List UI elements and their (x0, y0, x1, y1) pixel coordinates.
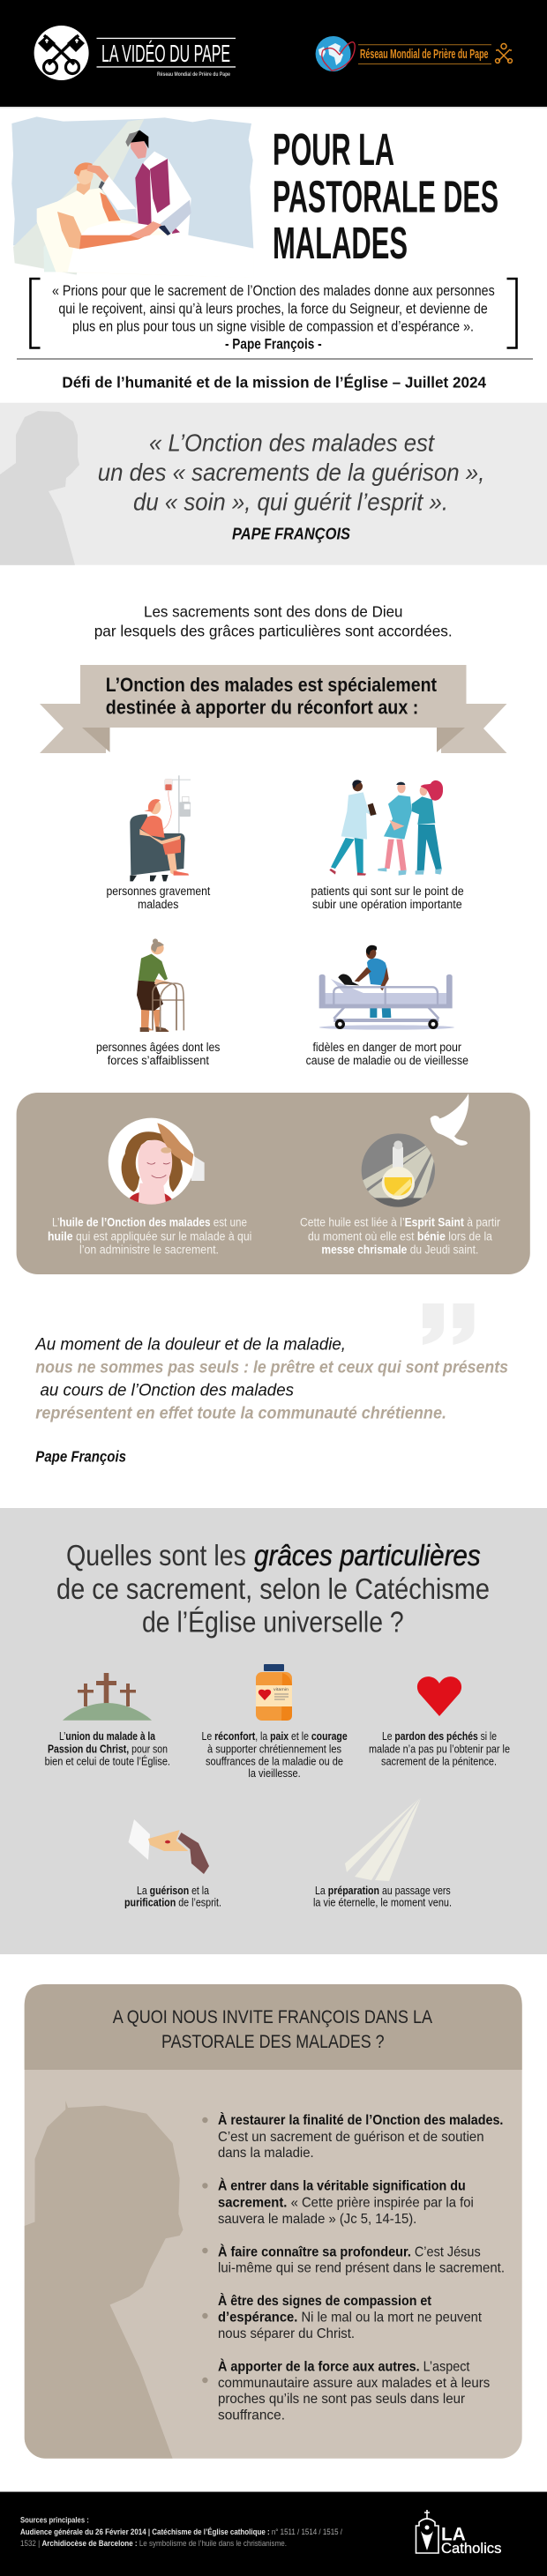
text: Holy Spirit explanation: messe chrismale du Jeudi saint. (321, 1243, 478, 1257)
item 5 (202, 2358, 490, 2423)
panel: pope quote band: un des « sacrements de la guérison », (98, 459, 484, 486)
sources: Audience générale du 26 Février 2014 | Catéchisme de l’Église catholique : n° 1511 / 1514 / 1515 / (20, 2527, 342, 2536)
item 2: sauvera le malade » (Jc 5, 14-15). (218, 2212, 416, 2227)
icon: pope silhouette (25, 2101, 184, 2459)
icon: three crosses on a hill (63, 1673, 152, 1721)
caption: union: bien et celui de toute l’Église. (45, 1754, 170, 1767)
caption: forgiveness (369, 1729, 510, 1767)
illustration: priest anointing a patient (11, 116, 253, 278)
caption: comfort: souffrances de la maladie ou de (206, 1754, 343, 1767)
panel: Francis's invitation (25, 1984, 522, 2459)
text: oil explanation (48, 1216, 251, 1257)
icon: pope silhouette (0, 411, 79, 565)
item 1: À restaurer la finalité de l’Onction des malades. (218, 2111, 503, 2128)
caption: comfort: Le réconfort, la paix et le courage (201, 1729, 348, 1743)
bullet list (202, 2111, 505, 2423)
caption: comfort (201, 1729, 348, 1780)
pope quote: not alone: au cours de l’Onction des malades (41, 1381, 294, 1400)
heading (56, 1539, 490, 1639)
caption: forgiveness: sacrement de la pénitence. (381, 1754, 497, 1767)
item 5: souffrance. (218, 2408, 285, 2423)
caption: comfort: à supporter chrétiennement les (207, 1743, 341, 1756)
text: oil explanation: L’huile de l’Onction des malades est une (52, 1216, 247, 1229)
caption: union: L’union du malade à la (59, 1729, 156, 1743)
prayer quote with brackets (30, 279, 517, 353)
caption: forgiveness: Le pardon des péchés si le (382, 1729, 497, 1743)
item 5: À apporter de la force aux autres. L’aspect (218, 2358, 470, 2374)
item 1 (202, 2111, 503, 2161)
header band (0, 0, 547, 108)
caption: in danger of death: cause de maladie ou de vieillesse (306, 1054, 468, 1067)
panel: pope quote band (0, 403, 547, 565)
icon: anointed forehead (109, 1118, 205, 1206)
sources: Sources principales : (20, 2516, 89, 2525)
caption: comfort: la vieillesse. (248, 1766, 301, 1780)
caption: surgery patients: patients qui sont sur le point de (311, 885, 464, 898)
item 5: proches qu’ils ne sont pas seuls dans leur (218, 2392, 466, 2407)
icon: globe with heart (316, 36, 355, 71)
prayer quote with brackets: qui le reçoivent, ainsi qu’à leurs proches, la force du Seigneur, et devienne de (58, 301, 488, 317)
subtitle: challenge of the month: Défi de l’humanité et de la mission de l’Église – Juillet 2024 (62, 372, 486, 391)
caption: seriously ill: malades (138, 898, 179, 911)
heading: grâces particulières (254, 1539, 481, 1572)
caption: preparation (313, 1884, 452, 1909)
logo: La Vidéo du Pape: Réseau Mondial de Prière du Pape (157, 71, 230, 78)
caption: forgiveness: malade n’a pas pu l’obtenir par le (369, 1743, 510, 1756)
caption: elderly: personnes âgées dont les (96, 1041, 221, 1054)
caption: in danger of death (306, 1041, 468, 1067)
text: Holy Spirit explanation: du moment où elle est bénie lors de la (308, 1229, 492, 1243)
item 1: C’est un sacrement de guérison et de soutien (218, 2130, 484, 2145)
item 3: À faire connaître sa profondeur. C’est Jésus (218, 2243, 481, 2259)
heading: de l’Église universelle ? (142, 1606, 404, 1639)
heading: PASTORALE DES MALADES ? (161, 2032, 385, 2052)
icon: elderly woman with walker (137, 938, 184, 1032)
text: oil explanation: l’on administre le sacrement. (79, 1243, 219, 1257)
logo: LA Catholics (416, 2510, 501, 2557)
caption: healing (124, 1884, 221, 1909)
item 2: À entrer dans la véritable signification du (218, 2177, 466, 2194)
item 1: dans la maladie. (218, 2146, 314, 2161)
ribbon heading (40, 665, 506, 753)
caption: healing: La guérison et la (137, 1884, 210, 1897)
title (273, 124, 498, 268)
icon: vitamin bottle (256, 1664, 292, 1721)
icon: red heart (417, 1676, 461, 1716)
caption: preparation: la vie éternelle, le moment venu. (313, 1896, 452, 1909)
text: Holy Spirit explanation (300, 1216, 500, 1257)
intro text: par lesquels des grâces particulières sont accordées. (94, 623, 453, 640)
prayer quote with brackets: - Pape François - (225, 337, 322, 353)
item 4: À être des signes de compassion et (218, 2292, 432, 2309)
logo: La Vidéo du Pape: LA VIDÉO DU PAPE (101, 40, 230, 67)
ribbon heading: destinée à apporter du réconfort aux : (106, 696, 418, 718)
title: POUR LA (273, 124, 394, 175)
footer band (0, 2491, 547, 2576)
item 5: communautaire assure aux malades et à leurs (218, 2376, 490, 2391)
pope quote: not alone: Pape François (35, 1447, 126, 1465)
item 2 (202, 2177, 474, 2227)
caption: healing: purification de l’esprit. (124, 1896, 221, 1909)
caption: seriously ill (106, 885, 211, 911)
icon: crossed keys logo (34, 26, 89, 80)
item 2: sacrement. « Cette prière inspirée par la foi (218, 2196, 474, 2210)
heading: de ce sacrement, selon le Catéchisme (56, 1572, 490, 1605)
item 4: nous séparer du Christ. (218, 2326, 355, 2341)
icon: oil flask with dove (356, 1094, 468, 1210)
icon: doctor, patient and nurse (329, 780, 443, 876)
panel: the oil (17, 1093, 530, 1274)
item 3: lui-même qui se rend présent dans le sacrement. (218, 2261, 505, 2276)
ribbon heading: L’Onction des malades est spécialement (106, 674, 437, 696)
panel: graces of the sacrament (0, 1508, 547, 1954)
item 4: d’espérance. Ni le mal ou la mort ne peuvent (218, 2311, 483, 2326)
panel: pope quote band: « L’Onction des malades est (149, 429, 435, 457)
logo: LA Catholics: Catholics (441, 2540, 501, 2557)
text: oil explanation: huile qui est appliquée sur le malade à qui (48, 1229, 251, 1243)
pope quote: not alone (34, 1335, 508, 1465)
icon: small orange keys (496, 44, 512, 63)
caption: elderly: forces s’affaiblissent (108, 1054, 209, 1067)
caption: surgery patients: subir une opération importante (312, 898, 462, 911)
heading (113, 2007, 432, 2052)
pope quote: not alone: Au moment de la douleur et de la maladie, (34, 1335, 346, 1355)
sources: 1532 | Archidiocèse de Barcelone : Le symbolisme de l’huile dans le christianisme. (20, 2539, 287, 2548)
pope quote: not alone: représentent en effet toute la communauté chrétienne. (35, 1403, 446, 1422)
caption: elderly (96, 1041, 221, 1067)
heading: Quelles sont les (66, 1539, 246, 1572)
caption: union: Passion du Christ, pour son (48, 1743, 168, 1756)
heading: A QUOI NOUS INVITE FRANÇOIS DANS LA (113, 2007, 432, 2027)
caption: seriously ill: personnes gravement (106, 885, 211, 898)
intro text: Les sacrements sont des dons de Dieu (144, 602, 402, 620)
text: Holy Spirit explanation: Cette huile est liée à l’Esprit Saint à partir (300, 1216, 500, 1229)
panel: pope quote band: du « soin », qui guérit l’esprit ». (133, 488, 448, 515)
sources (20, 2516, 342, 2548)
item 4 (202, 2292, 483, 2341)
prayer quote with brackets: plus en plus pour tous un signe visible de compassion et d’espérance ». (72, 319, 474, 335)
pope quote: not alone: nous ne sommes pas seuls : le prêtre et ceux qui sont présents (35, 1358, 508, 1378)
title: MALADES (273, 218, 408, 268)
icon: woman on IV in armchair (130, 775, 191, 881)
caption: surgery patients (311, 885, 464, 911)
logo: LA Catholics: LA (441, 2525, 466, 2545)
icon: rays of light (345, 1798, 421, 1881)
icon: vitamin bottle: vitamin (274, 1687, 289, 1691)
icon: quotation mark (423, 1303, 475, 1345)
icon: hospital bed with nurse (319, 945, 454, 1030)
logo: La Vidéo du Pape (97, 38, 236, 78)
caption: in danger of death: fidèles en danger de mort pour (312, 1041, 461, 1054)
caption: preparation: La préparation au passage vers (315, 1884, 451, 1897)
intro text (94, 602, 453, 640)
caption: union (45, 1729, 170, 1767)
item 3 (202, 2243, 505, 2276)
icon: healing hands (129, 1819, 209, 1874)
panel: pope quote band: PAPE FRANÇOIS (232, 525, 351, 543)
